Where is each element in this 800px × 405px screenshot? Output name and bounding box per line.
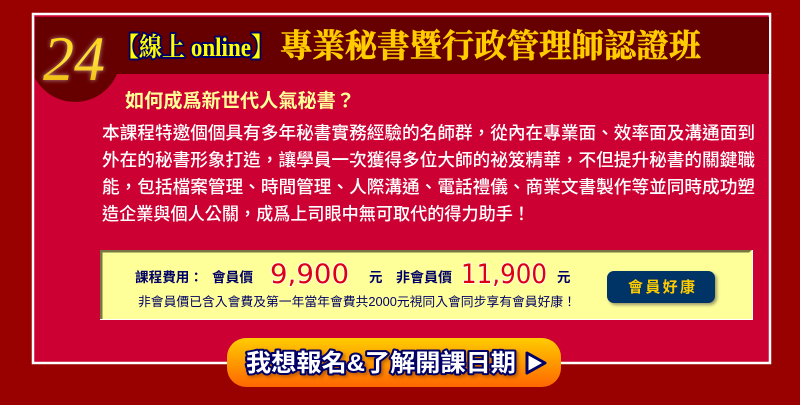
member price: 9,900: [270, 259, 349, 290]
body paragraph: 能，包括檔案管理、時間管理、人際溝通、電話禮儀、商業文書製作等並同時成功塑: [102, 177, 755, 197]
button label: 我想報名&了解開課日期: [246, 350, 516, 377]
non-member price: 11,900: [461, 259, 547, 290]
fee labels: 元: [557, 270, 571, 285]
member benefits button: [607, 271, 717, 305]
body paragraph: 外在的秘書形象打造，讓學員一次獲得多位大師的祕笈精華，不但提升秘書的關鍵職: [102, 150, 755, 170]
fee labels: [135, 269, 571, 285]
header band: [35, 17, 769, 74]
icon: play arrow: [527, 353, 545, 373]
body paragraph: [102, 123, 755, 224]
fee labels: 元: [369, 270, 383, 285]
title: 專業秘書暨行政管理師認證班: [280, 28, 701, 65]
fee labels: 課程費用：: [135, 269, 203, 285]
panel: price box: [100, 250, 753, 320]
badge number 24: 24: [43, 23, 105, 94]
member benefits button: 會員好康: [628, 278, 695, 296]
button shadow text: 我想報名&了解開課日期: [248, 352, 518, 379]
call to action button: [227, 338, 561, 387]
body paragraph: 造企業與個人公關，成爲上司眼中無可取代的得力助手！: [102, 204, 530, 224]
fee labels: 非會員價: [396, 269, 453, 285]
fee labels: 會員價: [212, 269, 254, 285]
online tag: 【線上 online】: [116, 33, 274, 62]
body paragraph: 本課程特邀個個具有多年秘書實務經驗的名師群，從內在專業面、效率面及溝通面到: [102, 123, 755, 143]
badge number 24: 24: [43, 23, 105, 94]
fee note: 非會員價已含入會費及第一年當年會費共2000元視同入會同步享有會員好康！: [138, 294, 576, 309]
subtitle: 如何成爲新世代人氣秘書？: [125, 89, 355, 112]
number badge circle: [35, 74, 117, 102]
